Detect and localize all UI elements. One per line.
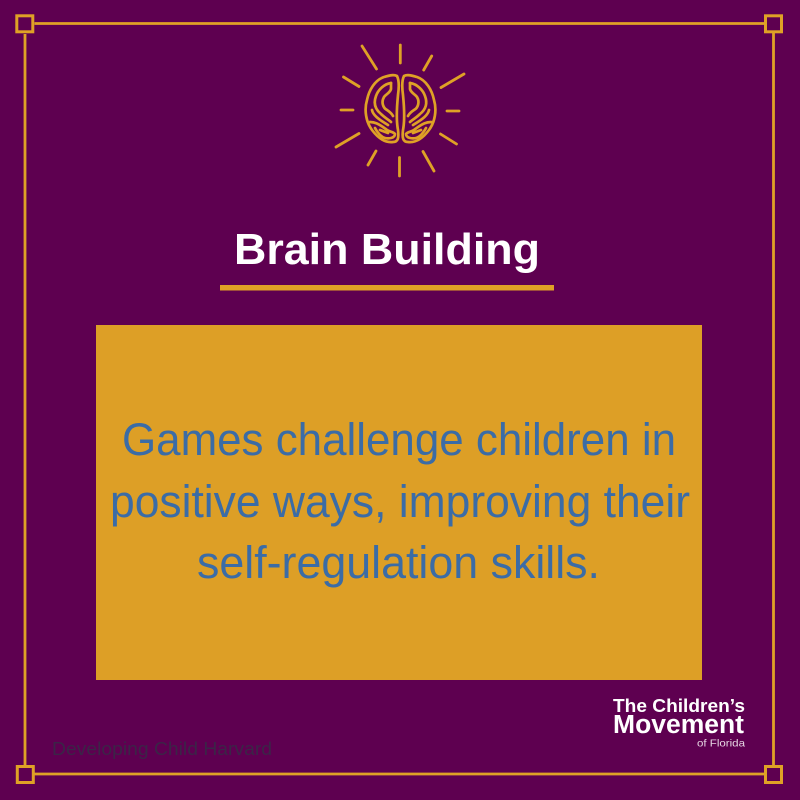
icon: brain with radiating rays	[336, 45, 464, 176]
source credit: Developing Child Harvard	[52, 739, 272, 759]
logo: The Children's Movement of Florida: The Children’s	[613, 695, 745, 716]
panel: message	[96, 325, 702, 680]
icon: right lobe	[402, 75, 435, 142]
icon: rays	[336, 45, 464, 176]
text block: message	[110, 414, 690, 588]
logo: The Children's Movement of Florida	[613, 695, 745, 750]
title underline	[220, 285, 554, 290]
logo: The Children's Movement of Florida: of Florida	[697, 738, 745, 750]
text block: message: positive ways, improving their	[110, 476, 690, 527]
title: Brain Building	[234, 225, 540, 274]
icon: brain	[366, 75, 435, 142]
icon: left lobe	[366, 75, 399, 142]
logo: The Children's Movement of Florida: Movement	[613, 711, 745, 739]
text block: message: Games challenge children in	[122, 414, 676, 465]
text block: message: self-regulation skills.	[197, 537, 600, 588]
